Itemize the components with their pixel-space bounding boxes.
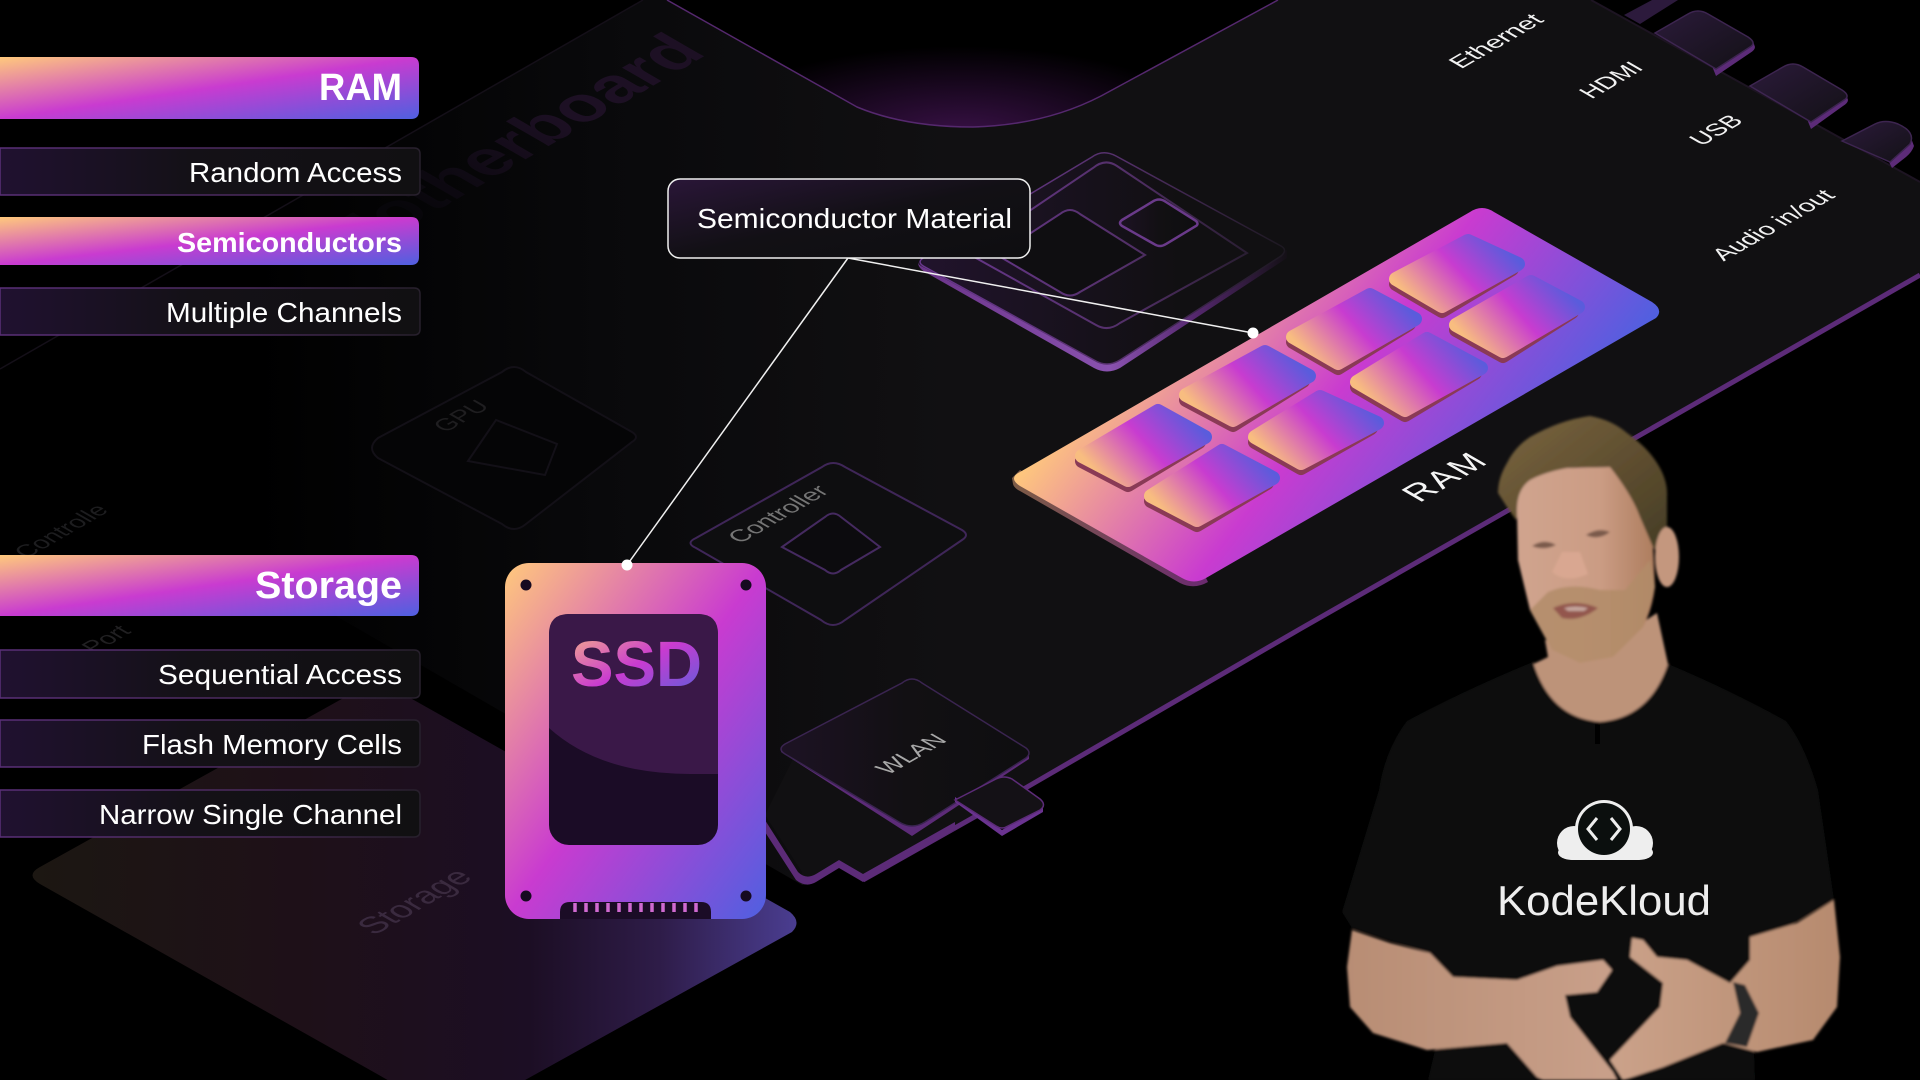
beard (1530, 560, 1655, 663)
eyes and brows (1532, 530, 1610, 548)
hair (1498, 416, 1667, 550)
SSD drive (505, 563, 766, 919)
item: Multiple Channels: Multiple Channels (166, 297, 402, 328)
item: Semiconductors: Semiconductors (177, 227, 402, 258)
SSD body (505, 563, 766, 919)
label: Ethernet: Ethernet (1443, 10, 1551, 72)
icon: top port (1624, 0, 1678, 24)
item: Sequential Access: Sequential Access (158, 659, 402, 690)
person: presenter (1342, 416, 1840, 1080)
Controller tile (690, 463, 966, 625)
mic (1595, 724, 1600, 744)
panel: Storage (0, 555, 420, 837)
icon: usb port (1842, 122, 1914, 168)
RAM board side (1012, 470, 1208, 586)
panel: RAM (0, 57, 420, 335)
mouth (1553, 603, 1598, 619)
icon: hdmi port (1750, 64, 1848, 129)
label: GPU: GPU (427, 397, 496, 436)
shirt (1342, 662, 1834, 1080)
label: Audio in/out: Audio in/out (1706, 186, 1842, 265)
callout: Semiconductor Material (668, 179, 1030, 258)
right arm (1610, 900, 1840, 1080)
ear (1655, 527, 1679, 587)
SSD title: SSD (571, 628, 702, 700)
SSD connector (560, 902, 711, 919)
label: WLAN: WLAN (870, 730, 953, 778)
motherboard label: Motherboard (295, 23, 721, 269)
CPU chip outline (918, 153, 1287, 372)
nose (1552, 552, 1588, 579)
heading: RAM: RAM (319, 67, 402, 109)
item: Flash Memory Cells: Flash Memory Cells (142, 729, 402, 760)
item: Multiple Channels (0, 288, 420, 335)
GPU tile (faded) (372, 367, 636, 529)
label: HDMI: HDMI (1573, 58, 1650, 102)
heading: RAM (0, 57, 419, 119)
label: Controller (faded): Controlle (8, 500, 115, 562)
item: Narrow Single Channel (0, 790, 420, 837)
callout: Semiconductor Material: Semiconductor Material (697, 203, 1012, 234)
motherboard notch glow (673, 0, 1278, 127)
item: Sequential Access (0, 650, 420, 698)
logo: KodeKloud wordmark: KodeKloud (1497, 877, 1711, 924)
person body and head (1342, 416, 1840, 1080)
watch (1725, 982, 1759, 1047)
RAM board (1014, 208, 1659, 582)
SSD screw holes (520, 580, 752, 902)
icon: ethernet port (1655, 11, 1755, 76)
item: Flash Memory Cells (0, 720, 420, 767)
RAM module (1012, 208, 1659, 586)
left arm (1347, 930, 1617, 1080)
label: RAM: RAM (1393, 448, 1496, 507)
item: Semiconductors (0, 217, 419, 265)
callout leader lines (622, 258, 1258, 570)
item: Random Access (0, 148, 420, 195)
item: Random Access: Random Access (189, 157, 402, 188)
SSD label panel (549, 614, 718, 845)
neck (1533, 613, 1668, 722)
heading: Storage (0, 555, 419, 616)
label: Controller: Controller (722, 482, 835, 547)
label: Storage (faded): Storage (348, 863, 480, 939)
storage platform (32, 682, 797, 1080)
WLAN connector (955, 777, 1044, 836)
logo: KodeKloud cloud (1557, 800, 1653, 860)
heading: Storage: Storage (255, 565, 402, 607)
label: USB: USB (1683, 111, 1750, 149)
face (1517, 467, 1655, 663)
item: Narrow Single Channel: Narrow Single Channel (99, 799, 402, 830)
label: Port (faded): Port (76, 621, 138, 657)
WLAN tile (781, 679, 1029, 836)
RAM chips (1082, 241, 1578, 525)
under-WLAN board section (765, 745, 955, 885)
